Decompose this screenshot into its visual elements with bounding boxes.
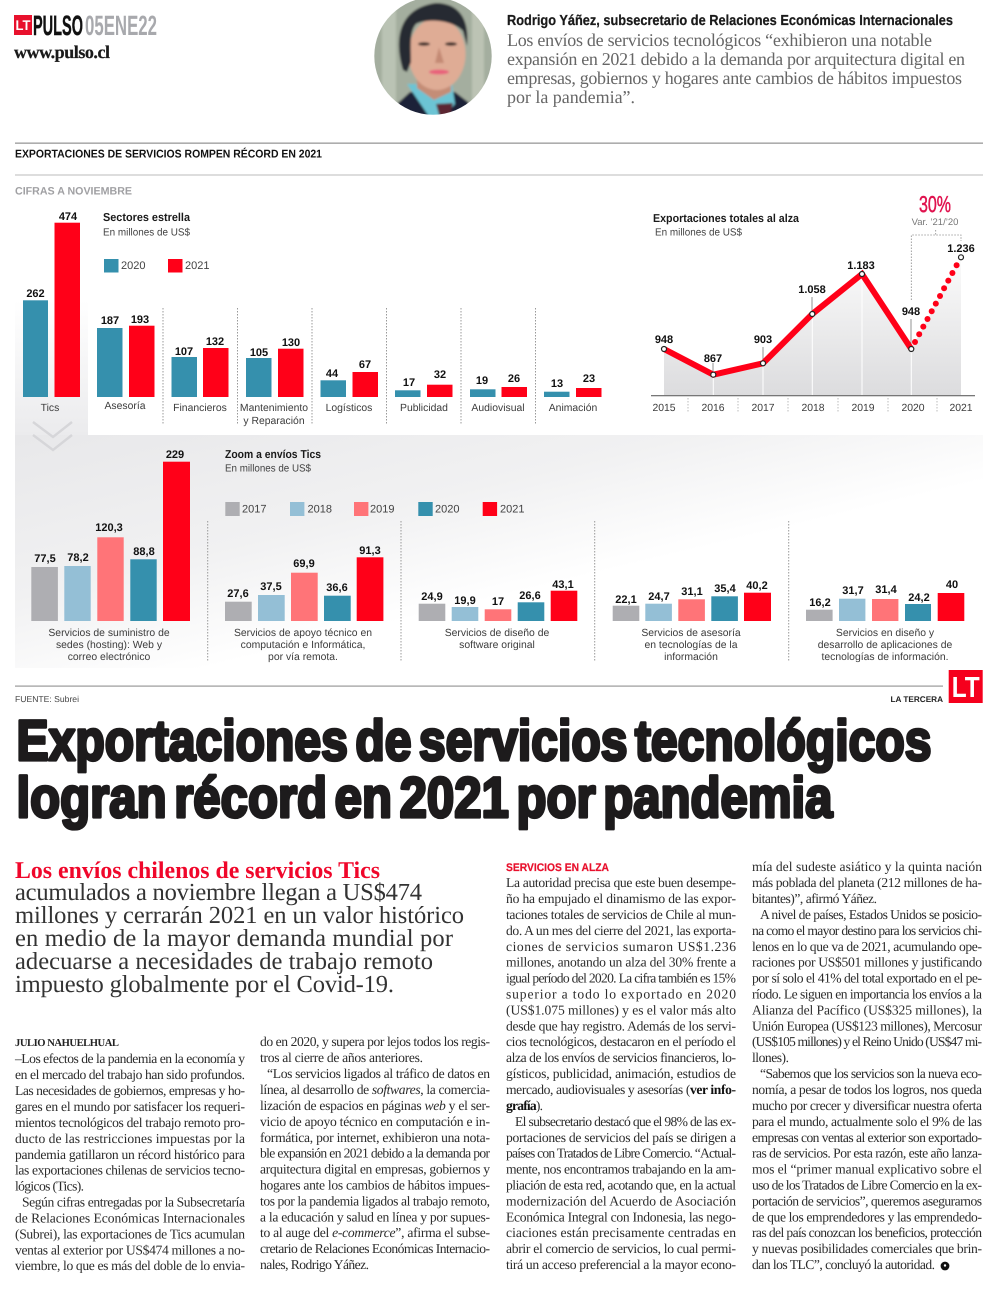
group: apoyo técnico: 36,6: [326, 582, 348, 594]
heading: zoom a envíos Tics: [225, 449, 321, 474]
group: asesoría: 35,4: [714, 583, 737, 595]
group: asesoría: 31,1: [681, 586, 703, 598]
group: aplicaciones: [806, 579, 964, 663]
body column 2: tros al cierre de años anteriores.: [260, 1050, 423, 1065]
legend: 2017 to 2021: 2018: [308, 504, 332, 516]
body column 1: ventas al exterior por US$474 millones a no-: [15, 1242, 245, 1258]
bars: Financieros: 107: [175, 346, 193, 358]
bars: Mantenimiento y Reparación: 130: [282, 337, 300, 349]
bars: Mantenimiento y Reparación: Mantenimiento: [240, 403, 308, 414]
body column 4: ríodo. Le siguen en importancia los envíos a la: [752, 986, 982, 1002]
body column 3: cios tecnológicos, destacaron en el período el: [506, 1034, 736, 1049]
body column 3: ciaciones están precisamente centradas en: [506, 1225, 736, 1240]
years: 2018: [801, 403, 825, 414]
main headline: logran récord en 2021 por pandemia: [16, 766, 834, 830]
values: [655, 243, 975, 365]
body column 3: portaciones de servicios del país se dirigen a: [506, 1130, 736, 1145]
group: aplicaciones: 40: [946, 579, 958, 591]
body column 1: Según cifras entregadas por la Subsecretaría: [22, 1194, 245, 1210]
bars: Logísticos: [320, 359, 378, 414]
body column 2: to al auge del e-commerce”, afirma el subse-: [260, 1225, 490, 1240]
body column 3: La autoridad precisa que este buen desempe-: [506, 875, 736, 890]
bars: Tics: 262: [26, 288, 45, 300]
group: diseño de software: [419, 579, 577, 651]
main headline: [16, 709, 932, 830]
body column 4: lenos en lo que va de 2021, acumulando ope-: [752, 939, 982, 954]
sector chart separators: [163, 308, 536, 424]
group: asesoría: 22,1: [615, 594, 637, 606]
credit: La Tercera: LA TERCERA: [891, 695, 943, 704]
masthead: section logo and date: LT: [16, 17, 31, 33]
group: asesoría: 40,2: [746, 580, 768, 592]
body column 3: superior a todo lo exportado en 2020: [506, 986, 736, 1002]
callout: 30% variation: [911, 191, 961, 300]
body column 2: [260, 1034, 490, 1272]
body column 4: más poblada del planeta (212 millones de ha-: [752, 875, 982, 890]
quote text: [507, 30, 965, 107]
bars: Animación: [544, 373, 602, 414]
heading: exportaciones totales: [653, 213, 800, 238]
body column 3: mente, nos encontramos trabajando en la am-: [506, 1162, 736, 1176]
legend: 2020 and 2021: [104, 259, 209, 272]
body column 3: Económica Integral con Indonesia, las nego-: [506, 1210, 736, 1224]
heading: exportaciones totales: Exportaciones totales al alza: [653, 213, 800, 225]
body column 1: pandemia gatillaron un récord histórico para: [15, 1147, 245, 1162]
values: 1.183: [847, 260, 875, 272]
legend: 2017 to 2021: 2020: [435, 504, 459, 516]
lead text: acumulados a noviembre llegan a US$474: [15, 879, 422, 906]
heading: sectores estrella: En millones de US$: [103, 228, 190, 238]
bars: Asesoría: 193: [131, 314, 149, 326]
legend: 2017 to 2021: 2017: [242, 504, 266, 516]
heading: sectores estrella: Sectores estrella: [103, 212, 191, 224]
heading: zoom a envíos Tics: Zoom a envíos Tics: [225, 449, 321, 461]
group: apoyo técnico: [225, 545, 383, 663]
bars: Audiovisual: Audiovisual: [471, 403, 525, 414]
bars: Animación: Animación: [549, 403, 597, 414]
group: diseño de software: 19,9: [454, 595, 476, 607]
body column 3: gísticos, publicidad, animación, estudios de: [506, 1066, 736, 1081]
group: asesoría: información: [664, 652, 718, 663]
body column 1: (Subrei), las exportaciones de Tics acumulan: [15, 1226, 245, 1242]
lead text: millones y cerrarán 2021 en un valor histórico: [15, 902, 464, 929]
body column 3: modernización del Acuerdo de Asociación: [506, 1194, 736, 1208]
bars: Logísticos: 44: [326, 368, 339, 380]
section heading: servicios en alza: SERVICIOS EN ALZA: [506, 862, 609, 874]
body column 2: formática, por internet, exhibieron una nota-: [260, 1130, 490, 1145]
body column 4: para el mundo, actualmente solo el 9% de las: [752, 1114, 982, 1129]
group: diseño de software: 26,6: [519, 590, 541, 602]
body column 1: viembre, lo que es más del doble de lo envia-: [15, 1258, 245, 1273]
body column 2: nales, Rodrigo Yáñez.: [260, 1257, 369, 1272]
group: apoyo técnico: por vía remota.: [268, 652, 338, 663]
bars: Publicidad: Publicidad: [400, 403, 448, 414]
bars: Asesoría: [97, 314, 154, 412]
group: aplicaciones: tecnologías de información.: [821, 652, 949, 663]
years: 2020: [901, 403, 925, 414]
lead text: en medio de la mayor demanda mundial por: [15, 925, 453, 952]
body column 3: ciones de servicios sumaron US$1.236: [506, 939, 736, 954]
drop lines: [713, 275, 911, 395]
legend: 2017 to 2021: [225, 502, 524, 516]
quote text: por la pandemia”.: [507, 87, 635, 107]
body column 4: empresas con ventas al exterior son exportado-: [752, 1130, 982, 1145]
dotted projection 2020-2021: [912, 262, 960, 345]
values: 948: [902, 306, 920, 318]
body column 3: taciones totales de servicios de Chile al mun-: [506, 907, 736, 922]
body column 2: hogares ante los cambios de hábitos impues-: [260, 1178, 490, 1192]
body column 4: Alianza del Pacífico (US$325 millones), la: [752, 1002, 982, 1018]
subtitle: cifras a noviembre: CIFRAS A NOVIEMBRE: [15, 186, 132, 198]
bars: Audiovisual: 26: [508, 373, 520, 385]
group: hosting: 229: [166, 449, 184, 461]
body column 4: A nivel de países, Estados Unidos se posicio-: [760, 907, 982, 922]
body column 1: gares en el mundo por satisfacer los requeri-: [15, 1099, 245, 1114]
group: apoyo técnico: 69,9: [293, 558, 315, 570]
quote text: empresas, gobiernos y hogares ante cambios de hábitos impuestos: [507, 68, 962, 88]
body column 3: do. A un mes del cierre del 2021, las exporta-: [506, 923, 736, 938]
body column 3: desde que hay registro. Además de los servi-: [506, 1018, 736, 1034]
quote block: [507, 13, 965, 107]
body column 3: (US$1.075 millones) y es el valor más alto: [506, 1002, 736, 1018]
values: 867: [704, 353, 722, 365]
group: asesoría: en tecnologías de la: [644, 640, 738, 651]
values: 903: [754, 334, 772, 346]
group: asesoría: Servicios de asesoría: [641, 628, 741, 639]
masthead: section logo and date: PULSO: [33, 10, 83, 41]
group: hosting: [31, 449, 190, 663]
legend: 2017 to 2021: 2021: [500, 504, 524, 516]
portrait photo: Rodrigo Yáñez: [374, 0, 492, 115]
bars: Logísticos: 67: [359, 359, 371, 371]
group: hosting: 77,5: [34, 553, 56, 565]
group: apoyo técnico: Servicios de apoyo técnico en: [234, 628, 372, 639]
body column 3: millones, anotando un alza del 30% frente a: [506, 954, 736, 970]
bars: Mantenimiento y Reparación: [240, 337, 308, 427]
bars: Logísticos: Logísticos: [326, 403, 372, 414]
line chart: exportaciones totales: [651, 243, 975, 414]
years: 2016: [701, 403, 725, 414]
group: asesoría: [613, 580, 771, 663]
body column 1: Las necesidades de gobiernos, empresas y ho-: [15, 1083, 245, 1098]
group: diseño de software: software original: [459, 640, 535, 651]
body column 4: Unión Europea (US$123 millones), Mercosur: [752, 1018, 982, 1034]
bars: Mantenimiento y Reparación: y Reparación: [243, 416, 305, 427]
masthead: section logo and date: 05ENE22: [85, 10, 157, 41]
body column 2: cretario de Relaciones Económicas Internacio-: [260, 1241, 490, 1256]
group: diseño de software: Servicios de diseño de: [445, 628, 549, 639]
body column 3: países con Tratados de Libre Comercio. “Actual-: [506, 1146, 736, 1160]
group: hosting: Servicios de suministro de: [48, 628, 170, 639]
body column 4: y nuevas posibilidades comerciales que brin-: [752, 1241, 982, 1256]
heading: sectores estrella: [103, 212, 191, 238]
website url: www.pulso.cl: [14, 42, 110, 62]
body column 2: ble expansión en 2021 debido a la demanda por: [260, 1146, 490, 1160]
axis: [651, 395, 975, 396]
bars: Audiovisual: 19: [476, 375, 488, 387]
values: 1.058: [798, 284, 826, 296]
point markers: [662, 255, 964, 377]
bars: Animación: 13: [551, 378, 563, 390]
body column 2: a la educación y salud en línea y por supues-: [260, 1210, 490, 1224]
body column 1: de Relaciones Económicas Internacionales: [15, 1210, 245, 1226]
group: apoyo técnico: 27,6: [227, 588, 249, 600]
group: hosting: 120,3: [95, 522, 123, 534]
body column 2: “Los servicios ligados al tráfico de datos en: [267, 1066, 490, 1081]
bars: Animación: 23: [583, 373, 595, 385]
logo: LT: LT: [952, 672, 980, 704]
body column 4: mía del sudeste asiático y la quinta nación: [752, 859, 982, 874]
bars: Publicidad: [395, 369, 452, 414]
body column 3: mercado, audiovisuales y asesorías (ver info-: [506, 1082, 736, 1097]
body column 4: bitantes)”, afirmó Yáñez.: [752, 891, 877, 906]
group: asesoría: 24,7: [648, 591, 670, 603]
masthead: section logo and date: [14, 10, 157, 41]
body column 2: vicio de apoyo técnico en computación e in-: [260, 1114, 490, 1129]
source line and bottom rule: FUENTE: Subrei: [15, 694, 79, 704]
body column 2: arquitectura digital en empresas, gobiernos y: [260, 1162, 490, 1176]
body column 1: en el mercado del trabajo han sido profundos.: [15, 1067, 245, 1082]
body column 3: pliación de esta red, acotando que, en la actual: [506, 1178, 736, 1192]
group: aplicaciones: 31,7: [842, 585, 864, 597]
group: diseño de software: 43,1: [552, 579, 574, 591]
background gradient panels: [15, 300, 983, 668]
group: diseño de software: 24,9: [421, 591, 443, 603]
body column 1: mientos tecnológicos del trabajo remoto pro-: [15, 1115, 245, 1130]
quote text: Los envíos de servicios tecnológicos “exhibieron una notable: [507, 30, 932, 50]
body column 2: lización de espacios en páginas web y el ser-: [260, 1098, 490, 1113]
body column 4: ras de servicios. Por esta razón, este año lanza-: [752, 1146, 982, 1160]
body column 4: uso de los Tratados de Libre Comercio en la ex-: [752, 1178, 982, 1192]
body column 4: por sí solo el 41% del total exportado en el pe-: [752, 970, 982, 986]
years: 2015: [652, 403, 676, 414]
bars: Financieros: 132: [206, 336, 224, 348]
legend: 2020 and 2021: 2021: [185, 260, 209, 272]
body column 2: línea, al desarrollo de softwares, la comercia-: [260, 1082, 490, 1097]
body column 3: grafía).: [506, 1098, 543, 1113]
body column 4: portación de servicios”, queremos asegurarnos: [752, 1194, 982, 1208]
lead text: impuesto globalmente por el Covid-19.: [15, 971, 394, 998]
body column 3: ño ha empujado el dinamismo de las expor-: [506, 891, 736, 906]
body column 1: –Los efectos de la pandemia en la economía y: [14, 1051, 245, 1066]
body column 4: nomía, a pesar de todos los logros, nos queda: [752, 1082, 982, 1097]
body column 1: ducto de las restricciones impuestas por la: [15, 1131, 245, 1146]
legend: 2017 to 2021: 2019: [370, 504, 394, 516]
body column 4: (US$105 millones) y el Reino Unido (US$47 mi-: [752, 1034, 982, 1049]
years: [652, 403, 973, 414]
body column 1: lógicos (Tics).: [15, 1178, 84, 1194]
group: aplicaciones: 31,4: [875, 584, 898, 596]
body column 4: ras del país conozcan los beneficios, protección: [752, 1225, 982, 1240]
bars: Tics: Tics: [41, 403, 59, 414]
legend: 2020 and 2021: 2020: [121, 260, 145, 272]
values: 948: [655, 334, 673, 346]
body column 4: mos el “primer manual explicativo sobre el: [752, 1162, 982, 1176]
bars: Asesoría: 187: [101, 315, 119, 327]
quote author: Rodrigo Yáñez, subsecretario de Relaciones Económicas Internacionales: [507, 13, 953, 29]
group: aplicaciones: desarrollo de aplicaciones de: [818, 640, 953, 651]
group: hosting: 88,8: [133, 546, 155, 558]
body column 3: abrir el comercio de servicios, lo cual permi-: [506, 1241, 736, 1256]
body column 3: [506, 875, 736, 1272]
line 2015-2020: [664, 274, 911, 375]
bar chart: sectores estrella: [23, 211, 602, 427]
bars: Publicidad: 32: [434, 369, 446, 381]
body column 4: mucho por crecer y diversificar nuestra oferta: [752, 1098, 982, 1113]
body column 4: “Sabemos que los servicios son la nueva eco-: [760, 1066, 982, 1081]
group: hosting: sedes (hosting): Web y: [56, 640, 163, 651]
area under line: [664, 257, 961, 396]
body column 4: raciones por US$501 millones y justificando: [752, 954, 982, 970]
bars: Tics: [23, 211, 80, 414]
heading: zoom a envíos Tics: En millones de US$: [225, 464, 311, 474]
body column 2: do en 2020, y supera por lejos todos los regis-: [260, 1034, 490, 1049]
body column 4: de que los emprendedores y las emprendedo-: [752, 1210, 982, 1224]
body column 4: na como el mayor destino para los servicios chi-: [752, 923, 982, 938]
body column 3: El subsecretario destacó que el 98% de las ex-: [515, 1114, 736, 1129]
group: apoyo técnico: 91,3: [359, 545, 381, 557]
bars: Publicidad: 17: [403, 377, 415, 389]
years: 2019: [851, 403, 875, 414]
body column 3: tirá un acceso preferencial a la mayor econo-: [506, 1257, 736, 1272]
years: 2021: [949, 403, 973, 414]
bars: Mantenimiento y Reparación: 105: [250, 347, 268, 359]
group: apoyo técnico: computación e Informática,: [241, 640, 365, 651]
body column 4: llones).: [752, 1050, 789, 1065]
bars: Audiovisual: [470, 373, 527, 414]
byline: JULIO NAHUELHUAL: [15, 1038, 119, 1049]
body column 3: alza de los envíos de servicios financieros, lo-: [506, 1050, 736, 1065]
lead paragraph: [15, 858, 464, 998]
body column 1: las exportaciones chilenas de servicios tecno-: [15, 1162, 245, 1178]
body column 2: tos por la pandemia ligados al trabajo remoto,: [260, 1194, 490, 1208]
group: aplicaciones: 16,2: [809, 597, 831, 609]
icon: end-of-article mark: [941, 1262, 949, 1270]
bars: Asesoría: Asesoría: [104, 401, 146, 412]
bar chart: zoom a envíos Tics: [31, 449, 964, 663]
infographic header rule and title: EXPORTACIONES DE SERVICIOS ROMPEN RÉCORD EN 2021: [15, 148, 322, 160]
quote text: expansión en 2021 debido a la demanda por arquitectura digital en: [507, 49, 965, 69]
body column 1: [14, 1051, 245, 1273]
callout: 30% variation: 30%: [919, 191, 951, 217]
lead text: adecuarse a necesidades de trabajo remoto: [15, 948, 433, 975]
bars: Financieros: Financieros: [173, 403, 227, 414]
body column 3: igual período del 2020. La cifra también es 15%: [506, 970, 736, 986]
group: diseño de software: 17: [492, 596, 504, 608]
lead text: [15, 879, 464, 998]
callout: 30% variation: Var. ’21/’20: [912, 217, 958, 228]
group: hosting: 78,2: [67, 552, 89, 564]
body column 4: dan los TLC”, concluyó la autoridad.: [752, 1257, 935, 1272]
body column 4: [752, 859, 982, 1272]
lead highlight: Los envíos chilenos de servicios Tics: [15, 858, 380, 884]
bars: Tics: 474: [59, 211, 78, 223]
group: aplicaciones: 24,2: [908, 592, 930, 604]
bars: Financieros: [172, 336, 228, 414]
group: aplicaciones: Servicios en diseño y: [836, 628, 935, 639]
heading: exportaciones totales: En millones de US$: [655, 228, 742, 238]
values: 1.236: [947, 243, 975, 255]
years: 2017: [751, 403, 775, 414]
chevrons: zoom arrow from Tics: [33, 422, 72, 450]
zoom chart separators: [208, 521, 789, 661]
group: hosting: correo electrónico: [68, 652, 151, 663]
group: apoyo técnico: 37,5: [260, 581, 282, 593]
